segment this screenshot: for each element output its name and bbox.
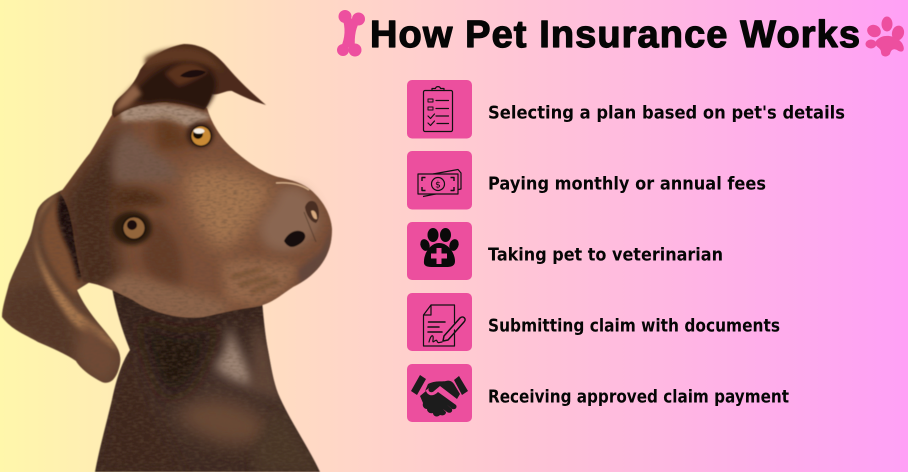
title: How Pet Insurance Works xyxy=(370,14,860,56)
icon tile: signed document xyxy=(407,293,472,351)
dog muzzle and nose xyxy=(260,183,320,251)
dog top ear xyxy=(112,44,266,118)
step text: Submitting claim with documents xyxy=(488,316,780,336)
dog left ear xyxy=(0,185,125,390)
dog neck and chest xyxy=(90,285,325,472)
icon tile: banknotes xyxy=(407,151,472,210)
icon: pink paw xyxy=(865,16,906,56)
step text: Taking pet to veterinarian xyxy=(488,244,723,266)
step 5: receiving payment xyxy=(407,364,789,422)
step 2: paying fees xyxy=(407,151,766,210)
step 1: selecting a plan xyxy=(407,80,845,138)
icon tile: handshake xyxy=(407,364,472,422)
icon tile: clipboard checklist xyxy=(407,80,472,138)
dog head xyxy=(60,102,333,318)
step 4: submitting claim xyxy=(407,293,780,351)
illustration: tilted brown dog xyxy=(0,44,340,472)
step 3: veterinarian xyxy=(407,222,723,280)
step text: Selecting a plan based on pet's details xyxy=(488,102,845,124)
icon tile: medical paw xyxy=(407,222,472,280)
dollar sign: $ xyxy=(435,180,441,190)
dog lower eye xyxy=(112,211,152,245)
step text: Paying monthly or annual fees xyxy=(488,174,766,194)
icon: pink bone xyxy=(337,10,365,56)
dog upper eye xyxy=(186,122,214,148)
title row xyxy=(337,10,906,56)
step text: Receiving approved claim payment xyxy=(488,386,789,408)
